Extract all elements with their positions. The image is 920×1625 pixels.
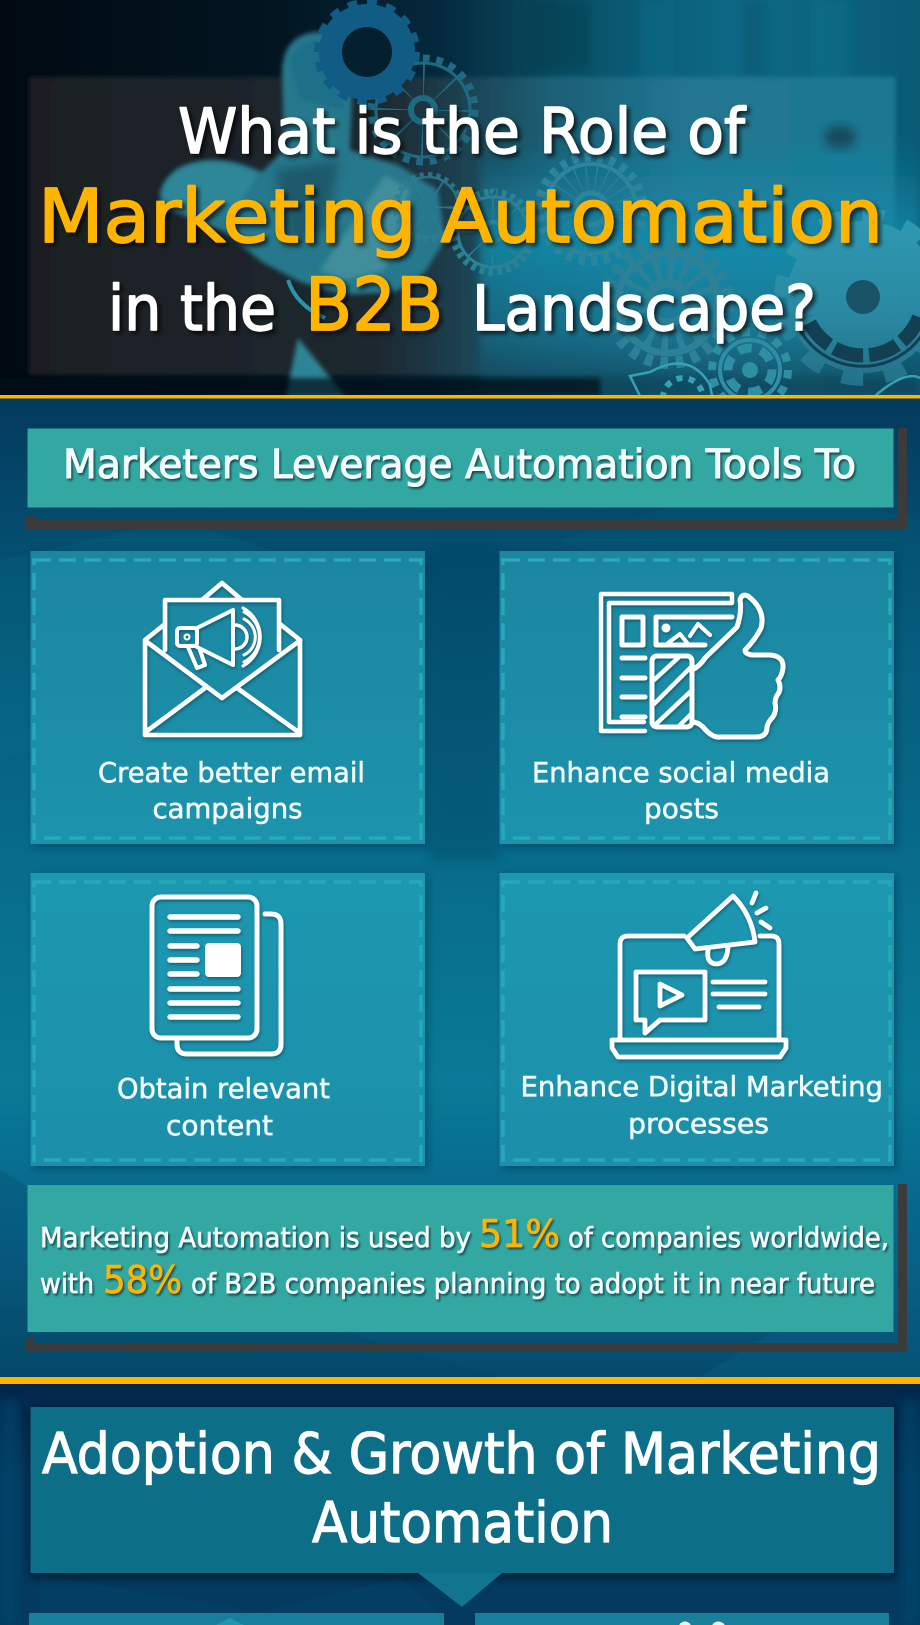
title: in the [108,272,276,345]
vertical blurred light strips [530,0,850,80]
title: B2B [305,263,443,348]
gear: faint on fingers [395,174,461,240]
gear: faint spoked upper [371,58,475,162]
label: posts [644,792,719,825]
title: Marketing Automation [38,174,883,260]
statistics text: 51% [479,1212,560,1256]
icon: documents [152,897,281,1054]
statistics text: Marketing Automation is used by [40,1221,471,1254]
section background: adoption [0,1384,920,1625]
panel: lower left box [29,1613,444,1625]
label: Obtain relevant [117,1072,330,1105]
gear: wide spokes [608,243,728,363]
title: Landscape? [472,272,816,345]
bottom dark fade [0,378,600,396]
label: Enhance Digital Marketing [520,1070,883,1103]
label: content [166,1109,273,1142]
glow on right of header [480,140,920,396]
label [98,756,365,825]
banner heading: Marketers Leverage Automation Tools To [63,442,856,488]
heading text: Adoption & Growth of Marketing [42,1422,881,1487]
card: email campaigns [30,551,425,844]
card: relevant content [30,873,425,1166]
icon: laptop with megaphone [612,893,786,1057]
panel: lower right box [475,1613,889,1625]
gear: fine spokes [539,157,643,261]
yellow divider top [0,395,920,398]
statistics text: of companies worldwide, [568,1221,889,1254]
heading text: Automation [312,1491,613,1556]
label: Create better email [98,756,365,789]
banner: marketers leverage [26,428,907,529]
gear: mid small [453,192,533,272]
statistics text: with [40,1267,94,1300]
statistics text: 58% [103,1258,182,1302]
label: campaigns [152,792,302,825]
panel: adoption heading [30,1407,894,1607]
label [532,756,830,825]
heading text [42,1422,881,1556]
translucent title panel [29,77,895,375]
gear: small bottom [712,332,788,408]
label [520,1070,883,1140]
statistics text [40,1212,889,1302]
label: processes [628,1107,769,1140]
gear: big right [781,215,920,379]
icon: web page with thumbs up [601,594,783,737]
gears [318,3,920,418]
heading pointer [418,1573,502,1607]
callout: adoption statistics [25,1184,907,1352]
icon: envelope with megaphone [145,583,300,735]
title [38,95,883,348]
statistics text: of B2B companies planning to adopt it in near future [191,1267,875,1300]
dark blur spot [824,125,856,149]
gear: top cog [318,3,416,101]
hand illustration [160,32,445,396]
icon fragment [216,1618,244,1625]
label: Enhance social media [532,756,830,789]
header banner [0,0,920,418]
gear: outlined bottom [630,364,920,418]
label [117,1072,330,1142]
card: social media [500,551,894,844]
title: What is the Role of [178,95,747,168]
yellow divider middle [0,1377,920,1384]
card: digital marketing [500,873,894,1166]
section background: marketers [0,398,920,1377]
icon fragment [680,1622,724,1625]
